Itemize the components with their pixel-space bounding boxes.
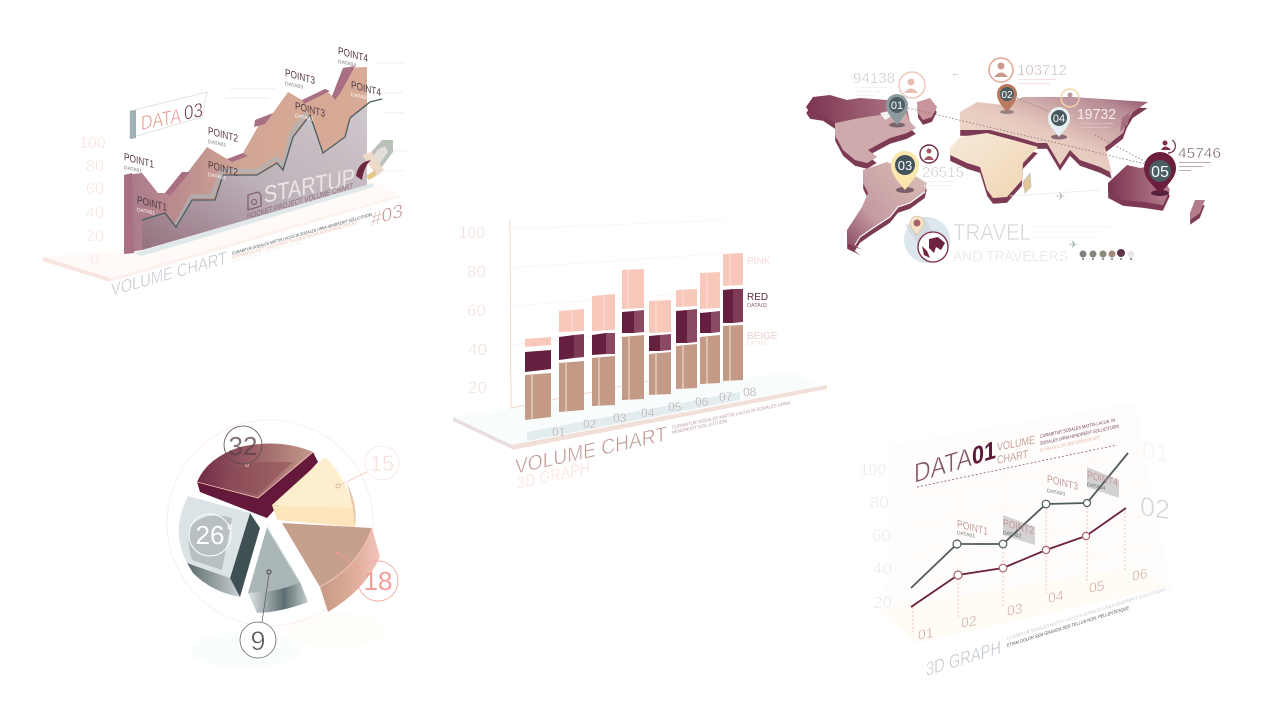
slice 18 <box>282 523 380 612</box>
japan <box>1120 112 1130 132</box>
lower point labels <box>137 79 381 217</box>
y axis labels <box>860 460 892 612</box>
map extrusion <box>806 101 1205 256</box>
startup title: STARTUP <box>264 164 355 209</box>
y axis labels: 80 <box>86 158 104 175</box>
continent: africa <box>950 133 1038 198</box>
pin 02: 02 <box>1001 90 1013 101</box>
upper point labels: POINT2 <box>208 125 238 145</box>
heading data01: 01 <box>972 436 996 471</box>
x axis labels: 03 <box>1007 600 1023 619</box>
side numbers <box>1140 437 1170 525</box>
axes <box>510 220 740 408</box>
data 03 tag: 03 <box>184 99 203 125</box>
slice 9 <box>248 527 308 613</box>
volume chart title: VOLUME CHART <box>515 422 667 479</box>
upper point labels: DATA04 <box>338 59 356 69</box>
caption: CURABITUR SODALES MATTIS LACUS IN SODALES URNA <box>672 400 791 431</box>
red data line <box>911 508 1126 607</box>
callout 26: 26 <box>196 520 224 550</box>
flight routes <box>908 98 1150 165</box>
legend: BEIGE <box>747 331 778 342</box>
volume chart title: VOLUME CHART <box>111 247 227 300</box>
upper point labels: DATA01 <box>124 165 142 175</box>
point labels: DATA03 <box>1047 488 1065 498</box>
dashed rule <box>917 445 1117 487</box>
pin 04 <box>1048 107 1070 140</box>
x axis labels: 05 <box>668 400 682 414</box>
bottom caption: ETIAM DOLOR SEM GRAVIDA SED TELLUS NON, PELLENTESQUE <box>1007 605 1130 649</box>
icon: person 02 <box>989 58 1013 82</box>
callout 26 <box>189 514 232 556</box>
grey data line <box>911 453 1128 588</box>
y axis labels: 20 <box>86 228 104 245</box>
icon: plane small: ✈ <box>1069 240 1077 251</box>
x axis labels: 04 <box>1048 587 1064 606</box>
legend: RED <box>747 292 768 303</box>
floor <box>190 612 385 668</box>
stat 19732: 19732 <box>1077 106 1116 123</box>
caption: SUSPENDISSE EGET LACUS ENIM AT FAUCIBUS MAURIS SUSPENDISSE POTENTI <box>232 220 357 260</box>
plane route: ✈ <box>1056 191 1065 203</box>
continent: australia <box>1108 165 1170 205</box>
bar 04 <box>622 269 644 400</box>
lower point labels: POINT4 <box>351 79 381 99</box>
panel: pie chart <box>167 420 399 668</box>
platform <box>453 372 827 450</box>
x axis labels: 08 <box>743 385 757 399</box>
lower point labels: POINT2 <box>208 159 238 179</box>
lower point labels: DATA01 <box>137 207 155 217</box>
travel note <box>1033 226 1113 238</box>
x axis labels <box>552 385 757 439</box>
callout 9: 9 <box>250 626 266 656</box>
travel subtitle: AND TRAVELERS <box>953 248 1068 265</box>
caption: ETIAM DOLOR SEM GRAVIDA SED <box>1040 435 1100 454</box>
lower shadow ribbon <box>176 113 306 225</box>
y axis labels: 80 <box>870 493 889 512</box>
lower point labels: POINT3 <box>295 100 325 120</box>
slice 32 <box>197 443 318 518</box>
caption <box>1040 417 1119 454</box>
continent: north america <box>806 95 916 163</box>
legend <box>747 256 778 347</box>
pin 05 <box>1144 152 1176 196</box>
3d graph title: 3D GRAPH <box>926 637 1001 681</box>
icon: rocket <box>356 140 393 180</box>
stat 26515: 26515 <box>922 164 964 181</box>
x axis labels: 06 <box>695 395 709 409</box>
panel: startup volume chart <box>43 45 407 300</box>
upper point labels: DATA02 <box>208 139 226 149</box>
y axis labels: 100 <box>459 223 485 242</box>
grid <box>912 455 1155 600</box>
caption: HENDRERIT SOLLICITUDIN <box>672 418 727 436</box>
pin 01 <box>886 94 908 128</box>
continent: greenland <box>917 98 937 120</box>
red markers <box>954 532 1090 579</box>
pin 03: 03 <box>898 158 912 173</box>
x axis labels: 02 <box>583 417 597 431</box>
y axis labels: 60 <box>872 526 891 545</box>
x band <box>527 392 740 441</box>
bar 02 <box>559 309 584 412</box>
wall <box>885 402 1172 612</box>
lower point labels: DATA04 <box>351 92 369 102</box>
badge: travel globe <box>904 216 950 263</box>
side numbers: 02 <box>1140 490 1170 525</box>
icon: person 05 <box>1161 140 1175 153</box>
stat 94138 <box>853 70 895 96</box>
x axis labels <box>918 565 1148 643</box>
heading data01: VOLUME <box>997 433 1035 454</box>
y axis labels <box>79 135 106 268</box>
caption: NULLA TINCIDUNT FELIS VITAE <box>232 239 302 264</box>
lower data line <box>142 99 382 227</box>
bar 07 <box>700 272 720 384</box>
icon: document <box>248 192 261 210</box>
3d graph subtitle: 3D GRAPH <box>517 457 590 493</box>
upper point labels: DATA03 <box>285 81 303 91</box>
great lakes patch <box>880 111 892 120</box>
lower point labels: POINT1 <box>137 194 167 214</box>
callout 18: 18 <box>364 566 392 596</box>
panel: line graph <box>860 402 1172 681</box>
pin 05: 05 <box>1151 164 1169 181</box>
platform <box>43 172 400 282</box>
bar 08 <box>723 253 743 381</box>
panel: 3d bar chart <box>453 220 827 493</box>
y axis labels: 20 <box>468 378 487 397</box>
lower point labels: DATA03 <box>295 113 313 123</box>
callout 32 <box>224 426 262 466</box>
chart base strip <box>134 183 373 256</box>
point labels <box>957 469 1118 540</box>
pin 01: 01 <box>891 100 903 112</box>
y axis labels: 40 <box>873 559 892 578</box>
bar 06 <box>676 289 697 389</box>
point labels: POINT1 <box>957 518 988 538</box>
point labels: POINT2 <box>1003 517 1034 537</box>
lower data area <box>142 106 367 250</box>
upper point labels: POINT1 <box>124 151 154 171</box>
y axis labels: 60 <box>467 301 486 320</box>
caption: SODALES URNA HENDRERIT SOLLICITUDIN <box>1040 424 1119 447</box>
caption <box>232 212 372 264</box>
continent: eurasia <box>960 97 1148 173</box>
y axis labels <box>459 223 487 397</box>
north america lower shade <box>835 111 916 163</box>
bar 01 <box>525 337 551 420</box>
y axis labels: 80 <box>467 262 486 281</box>
callout 32: 32 <box>229 431 257 461</box>
caption: CURABITUR SODALES MATTIS LACUS. IN <box>1040 417 1115 440</box>
stat 45746: 45746 <box>1178 145 1221 162</box>
point labels: DATA04 <box>1087 482 1105 492</box>
upper point labels: POINT3 <box>285 67 315 87</box>
stat 103712: 103712 <box>1017 62 1067 79</box>
callout 15: 15 <box>370 451 394 476</box>
heading data01 <box>914 433 1035 489</box>
x axis labels: 07 <box>719 390 733 404</box>
callout 18 <box>336 552 398 601</box>
upper point labels: POINT4 <box>338 45 368 65</box>
y axis labels: 100 <box>79 135 106 152</box>
upper data area <box>124 67 367 253</box>
y axis labels: 60 <box>86 181 104 198</box>
x axis labels: 01 <box>918 624 934 643</box>
pin 04: 04 <box>1053 113 1065 125</box>
panel: world map <box>806 58 1221 265</box>
point labels: DATA01 <box>957 530 975 540</box>
x axis labels: 06 <box>1132 565 1148 584</box>
y axis labels: 40 <box>468 340 487 359</box>
data 03 tag <box>130 92 207 139</box>
chart number: #03 <box>371 200 403 231</box>
outer ring <box>167 420 373 626</box>
legend: DATA02 <box>747 303 767 309</box>
y axis labels: 40 <box>86 205 104 222</box>
slice 15 <box>272 457 356 527</box>
y axis labels: 100 <box>860 460 886 479</box>
continent: south america <box>847 162 927 250</box>
highlight boxes <box>1003 467 1119 545</box>
legend: PINK <box>747 256 771 267</box>
grey markers <box>953 500 1090 548</box>
heading data01: DATA <box>914 441 972 489</box>
dashed drop lines <box>913 507 1125 632</box>
stat 45746 <box>1178 145 1221 171</box>
icon: person 01 <box>899 72 925 98</box>
heading data01: CHART <box>997 448 1028 467</box>
plane route <box>1010 190 1100 203</box>
faint wall side notes <box>225 62 407 172</box>
mini pins legend <box>1080 249 1134 260</box>
bottom caption: CURABITUR SODALES MATTIS LACUS IN SODALES URNA HENDRERIT SOLLICITUDIN <box>1007 587 1165 642</box>
upper area ribbon <box>124 66 355 254</box>
point labels: POINT3 <box>1047 473 1078 493</box>
x axis labels: 01 <box>552 425 566 439</box>
x axis labels: 05 <box>1089 577 1105 596</box>
slice 26 <box>179 496 260 597</box>
bar 05 <box>649 300 671 395</box>
caption: CURABITUR SODALES MATTIS LACUS IN SODALES URNA HENDRERIT SOLLICITUDIN <box>232 212 372 256</box>
point labels: POINT4 <box>1087 469 1118 489</box>
x axis labels: 03 <box>613 411 627 425</box>
startup subtitle: ROCKET PROJECT VOLUME CHART <box>247 181 353 221</box>
stat 94138: 94138 <box>853 70 895 87</box>
island: madagascar <box>1023 173 1031 193</box>
pin 03 <box>891 151 919 193</box>
icon: plane top: ← <box>951 68 960 78</box>
point labels: DATA02 <box>1003 530 1021 540</box>
x axis labels: 04 <box>641 406 655 420</box>
data 03 tag: DATA <box>141 105 181 135</box>
lower point labels: DATA02 <box>208 172 226 182</box>
bar 03 <box>592 294 615 406</box>
side numbers: 01 <box>1142 437 1169 468</box>
icon: person 04 <box>1061 89 1079 107</box>
south america coast highlight <box>855 192 925 245</box>
legend: DATA03 <box>747 341 767 347</box>
x axis labels: 02 <box>961 612 977 631</box>
pin 02 <box>997 84 1017 114</box>
travel title: TRAVEL <box>953 219 1031 245</box>
upper point labels <box>124 45 368 175</box>
y axis labels: 20 <box>873 593 892 612</box>
floor <box>877 567 1167 643</box>
callout 15 <box>336 446 399 488</box>
icon: person 03 <box>920 145 938 163</box>
continent: new zealand <box>1190 200 1205 220</box>
y axis labels: 0 <box>90 251 99 268</box>
callout 9 <box>240 570 276 658</box>
